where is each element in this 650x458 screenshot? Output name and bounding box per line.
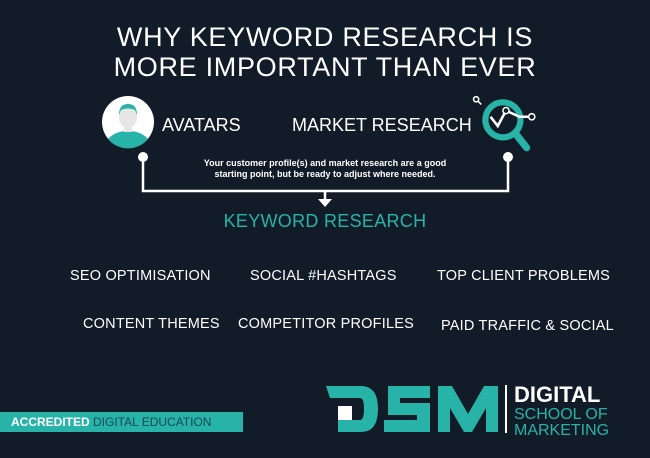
logo text: MARKETING <box>514 422 609 439</box>
note text: Your customer profile(s) and market research are a good <box>204 158 446 168</box>
item: SOCIAL #HASHTAGS <box>250 268 397 284</box>
logo text: SCHOOL OF <box>514 406 608 423</box>
title <box>114 22 536 82</box>
item: COMPETITOR PROFILES <box>238 316 414 332</box>
title: MORE IMPORTANT THAN EVER <box>114 52 536 82</box>
market research label: MARKET RESEARCH <box>292 115 472 135</box>
note text: starting point, but be ready to adjust where needed. <box>214 169 436 179</box>
item: SEO OPTIMISATION <box>70 268 211 284</box>
item: PAID TRAFFIC & SOCIAL <box>441 318 614 334</box>
icon: search chart <box>472 96 536 152</box>
items <box>70 268 614 334</box>
keyword research heading: KEYWORD RESEARCH <box>224 211 426 231</box>
logo text <box>514 382 609 439</box>
title: WHY KEYWORD RESEARCH IS <box>117 22 533 52</box>
note text <box>204 158 446 179</box>
item: CONTENT THEMES <box>83 316 220 332</box>
avatars label: AVATARS <box>162 115 241 135</box>
connector arrow <box>138 152 513 207</box>
item: TOP CLIENT PROBLEMS <box>437 268 610 284</box>
logo text: DIGITAL <box>514 382 600 407</box>
logo divider <box>505 385 507 433</box>
accredited banner: ACCREDITED DIGITAL EDUCATION <box>11 415 211 429</box>
logo: DSM <box>326 386 498 432</box>
icon: avatar <box>102 96 154 148</box>
accredited banner <box>0 412 243 432</box>
